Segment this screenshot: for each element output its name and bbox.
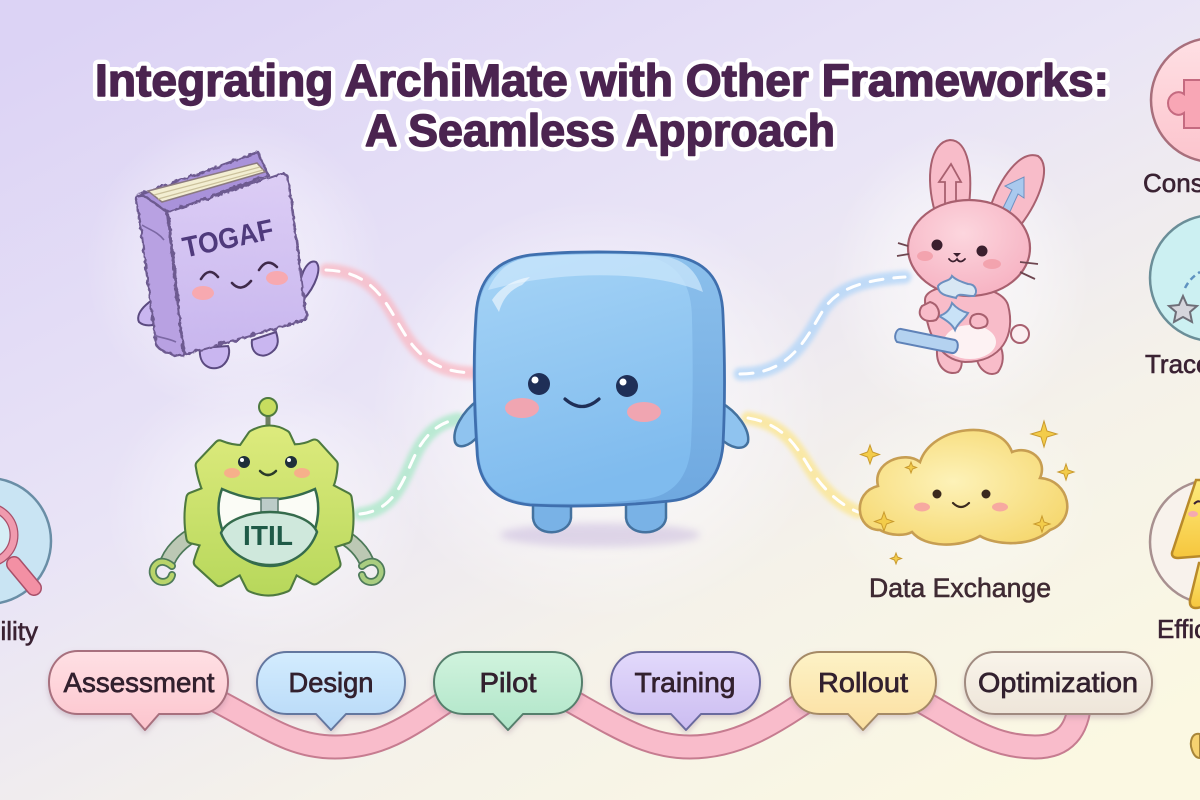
cube face [505, 373, 661, 422]
title: Integrating ArchiMate with Other Frameworks: [95, 55, 1109, 106]
sparkles [860, 421, 1074, 564]
book cover [168, 174, 307, 354]
puzzle connector [938, 276, 976, 330]
step: Training [611, 652, 760, 730]
step: Assessment: Assessment [64, 667, 215, 698]
cube body [474, 252, 724, 506]
character: ITIL gear robot [153, 398, 381, 590]
benefit: Efficiency [1150, 480, 1200, 644]
step: Pilot: Pilot [480, 667, 537, 698]
book arms and feet [138, 262, 318, 368]
rabbit body [925, 286, 1010, 362]
connector: TOGAF to cube [326, 270, 472, 373]
rabbit head [908, 200, 1030, 296]
step: Design: Design [288, 667, 374, 698]
whiskers [897, 243, 1038, 279]
ITIL plate [221, 512, 317, 565]
label: Data Exchange: Data Exchange [869, 573, 1051, 603]
step: Rollout [790, 652, 936, 730]
character: ITIL gear robot: ITIL [243, 520, 293, 551]
step: Assessment [49, 651, 228, 730]
title [95, 55, 1109, 156]
title: A Seamless Approach [365, 105, 835, 156]
step: Rollout: Rollout [818, 667, 908, 698]
benefit: Traceability [1145, 215, 1200, 379]
character: rabbit [895, 140, 1044, 374]
connector: cube to cloud [748, 418, 858, 512]
book label: TOGAF [180, 214, 276, 264]
character: TOGAF book [135, 152, 318, 368]
step: Optimization [965, 652, 1152, 714]
robot antenna [259, 398, 277, 434]
rabbit hands and rod [895, 302, 988, 353]
title: Integrating ArchiMate with Other Frameworks: [95, 55, 1109, 106]
cloud face [914, 490, 1008, 512]
rabbit legs and tail [925, 286, 1029, 374]
gear mouth window [219, 489, 318, 566]
rabbit ears [930, 140, 1044, 226]
connector: ITIL to cube [360, 419, 458, 514]
title: A Seamless Approach [365, 105, 835, 156]
cube arms [454, 400, 748, 448]
step: Design [257, 652, 405, 730]
cube feet [533, 498, 666, 532]
connector: cube to rabbit [740, 277, 905, 374]
robot arms [153, 532, 381, 582]
benefit: Visibility [0, 478, 51, 646]
benefit: Consistency [1143, 38, 1200, 198]
character: ArchiMate cube [454, 252, 748, 547]
gear body [190, 431, 348, 590]
step: Training: Training [634, 667, 736, 698]
rabbit face [917, 240, 1001, 269]
roadmap ribbon [200, 692, 1080, 747]
step: Pilot [434, 652, 582, 730]
character: data exchange cloud [860, 421, 1074, 564]
book back and spine [135, 152, 268, 356]
gear face [224, 456, 310, 478]
book face [192, 263, 288, 300]
partial icon: bottom right [1191, 734, 1200, 758]
step: Optimization: Optimization [978, 667, 1138, 698]
